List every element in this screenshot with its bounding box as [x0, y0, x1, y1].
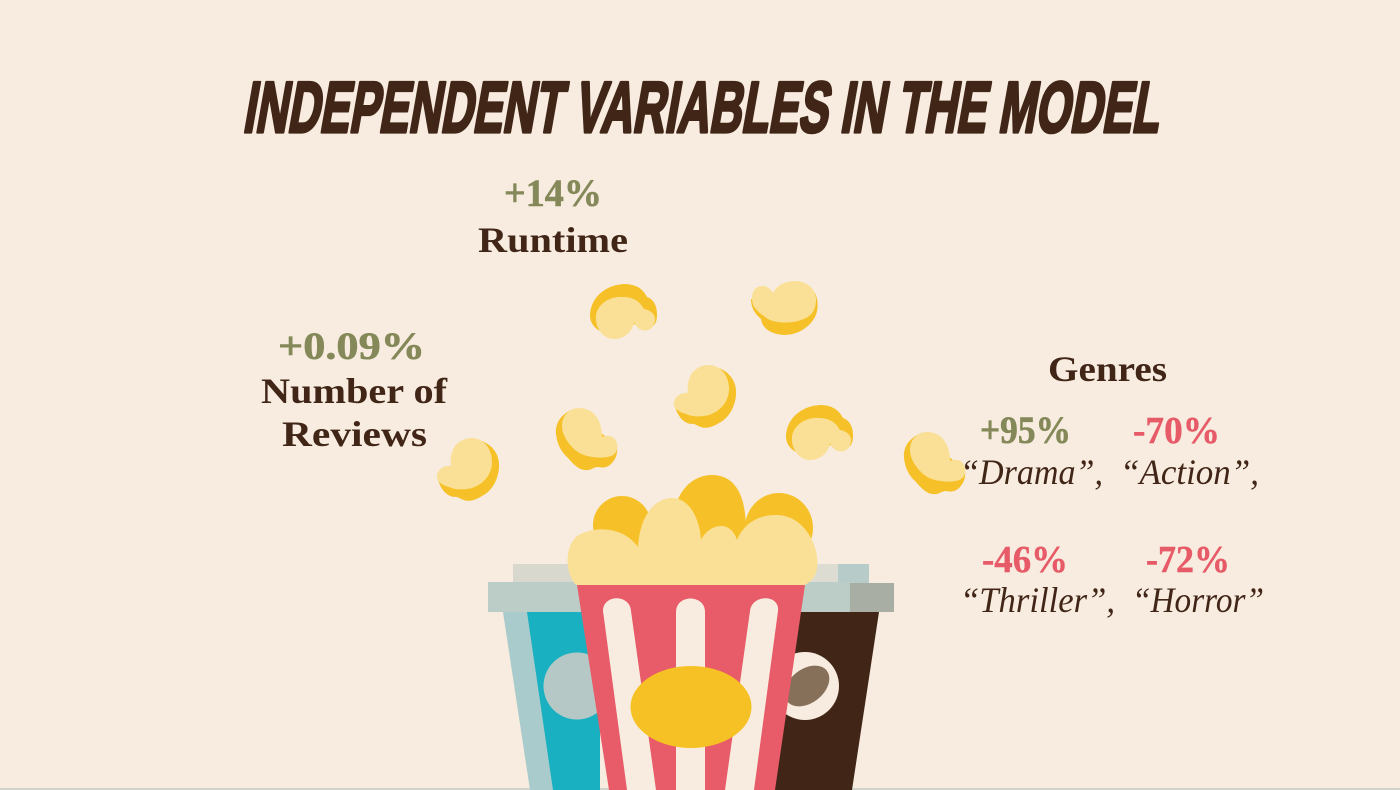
left drink cup	[488, 564, 610, 790]
popcorn bucket	[577, 585, 805, 790]
number of reviews stat	[261, 325, 448, 454]
runtime stat	[478, 172, 628, 260]
runtime stat: +14%	[504, 172, 602, 215]
genres panel: “Horror”	[1132, 580, 1264, 620]
kernel 4	[556, 408, 617, 470]
kernel 3	[674, 365, 736, 428]
kernel 5	[786, 405, 853, 460]
bucket stripes	[603, 598, 778, 790]
runtime stat: Runtime	[478, 220, 628, 260]
kernel 7	[437, 438, 499, 501]
genres panel: -72%	[1146, 539, 1230, 581]
kernel 6	[904, 432, 965, 494]
genres panel: -70%	[1133, 410, 1220, 452]
kernel 2	[751, 281, 818, 335]
genres panel: “Action”,	[1120, 452, 1259, 492]
genres panel: -46%	[982, 539, 1068, 581]
genres panel: “Drama”,	[960, 452, 1103, 492]
right drink cup	[770, 564, 894, 790]
genres panel: “Thriller”,	[960, 580, 1115, 620]
popcorn pile	[568, 475, 817, 585]
number of reviews stat: Reviews	[282, 414, 427, 454]
number of reviews stat: +0.09%	[278, 325, 425, 368]
kernel 1	[590, 284, 657, 339]
genres panel: Genres	[1048, 349, 1167, 389]
genres panel: +95%	[980, 409, 1071, 452]
genres panel	[960, 349, 1264, 620]
number of reviews stat: Number of	[261, 371, 448, 411]
